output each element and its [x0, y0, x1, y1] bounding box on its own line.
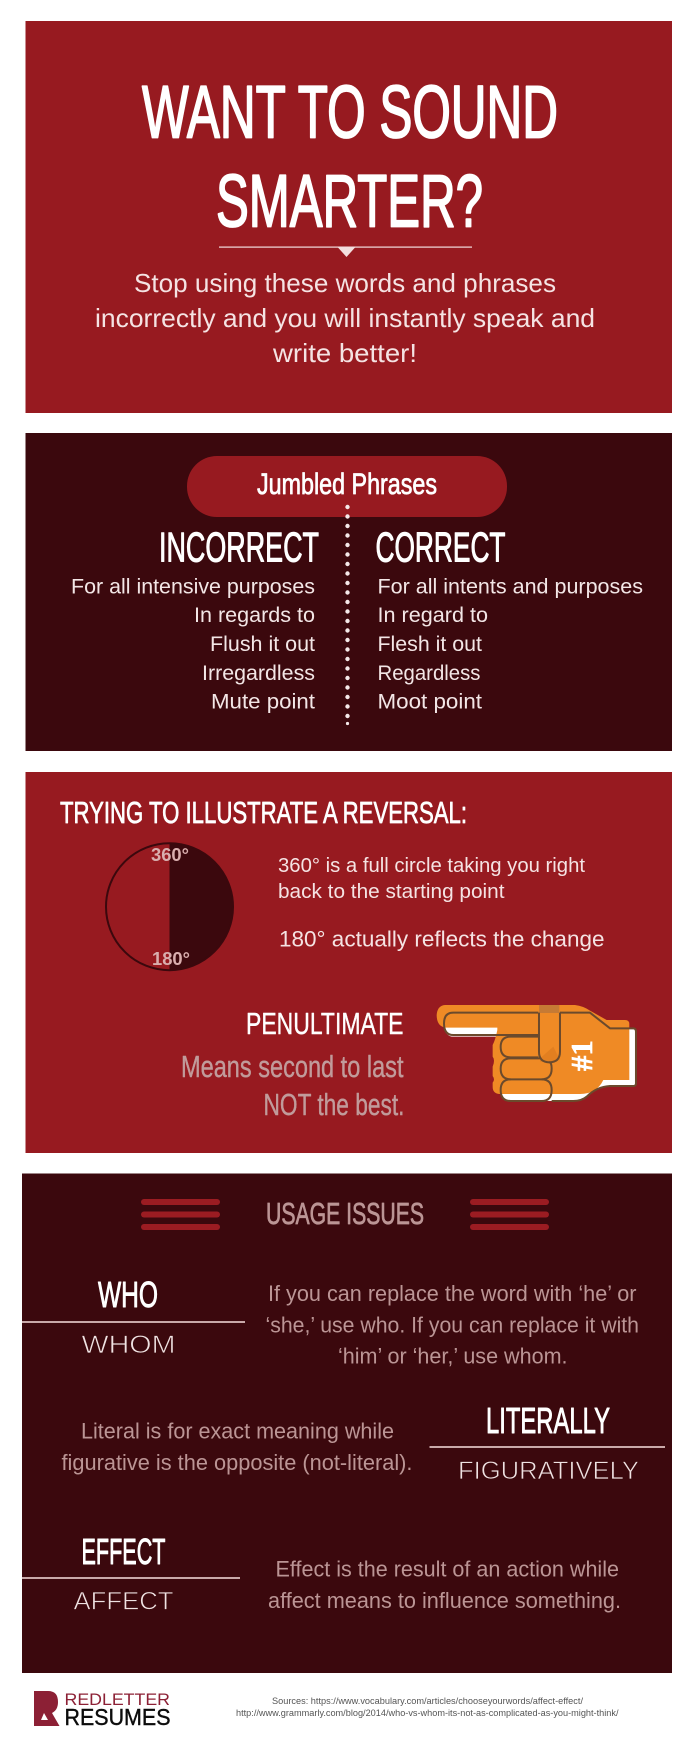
- subtitle: write better!: [272, 338, 417, 368]
- divider with pointer: [219, 246, 472, 257]
- effect vs affect: [22, 1531, 621, 1616]
- reversal explanation: back to the starting point: [278, 881, 505, 903]
- icon: foam finger hand: #1: [565, 1040, 599, 1071]
- reversal explanation: [278, 855, 604, 952]
- icon: foam finger hand: [437, 1005, 636, 1101]
- chart: half circle: 180°: [152, 949, 190, 969]
- chart: half circle: [106, 843, 234, 971]
- who vs whom: ‘she,’ use who. If you can replace it with: [266, 1312, 639, 1338]
- penultimate text: [181, 1007, 404, 1122]
- correct column: Moot point: [378, 690, 482, 714]
- incorrect column: [71, 524, 319, 714]
- subtitle: incorrectly and you will instantly speak and: [95, 303, 595, 333]
- reversal heading: TRYING TO ILLUSTRATE A REVERSAL:: [60, 796, 467, 830]
- effect vs affect: EFFECT: [82, 1531, 166, 1572]
- penultimate text: PENULTIMATE: [246, 1007, 404, 1041]
- literally vs figuratively: FIGURATIVELY: [458, 1457, 639, 1485]
- correct column: Regardless: [378, 662, 480, 685]
- logo: RedLetter Resumes: RESUMES: [64, 1704, 170, 1730]
- incorrect column: Flush it out: [210, 633, 315, 656]
- incorrect column: Irregardless: [202, 662, 315, 685]
- who vs whom: ‘him’ or ‘her,’ use whom.: [338, 1344, 568, 1368]
- incorrect column: INCORRECT: [159, 524, 319, 570]
- correct column: [376, 524, 643, 714]
- usage heading with bars: USAGE ISSUES: [266, 1197, 424, 1231]
- correct column: Flesh it out: [378, 633, 482, 656]
- subtitle: [95, 268, 595, 368]
- correct column: In regard to: [378, 604, 488, 627]
- incorrect column: For all intensive purposes: [71, 576, 315, 598]
- literally vs figuratively: [62, 1400, 665, 1485]
- correct column: For all intents and purposes: [378, 576, 643, 598]
- subtitle: Stop using these words and phrases: [134, 268, 556, 298]
- sources: Sources: https://www.vocabulary.com/articles/chooseyourwords/affect-effect/: [272, 1696, 584, 1706]
- logo: RedLetter Resumes: [34, 1690, 170, 1730]
- title: SMARTER?: [216, 160, 483, 242]
- incorrect column: In regards to: [194, 604, 315, 627]
- panel: reversal and penultimate: [26, 772, 672, 1153]
- effect vs affect: Effect is the result of an action while: [276, 1556, 619, 1582]
- literally vs figuratively: LITERALLY: [486, 1400, 610, 1441]
- penultimate text: Means second to last: [181, 1049, 404, 1084]
- panel: header: [26, 21, 672, 413]
- who vs whom: WHOM: [82, 1331, 176, 1359]
- sources: http://www.grammarly.com/blog/2014/who-vs-whom-its-not-as-complicated-as-you-might-think/: [236, 1708, 619, 1718]
- sources: [236, 1696, 619, 1718]
- pill heading: [187, 456, 507, 517]
- effect vs affect: AFFECT: [74, 1588, 174, 1616]
- incorrect column: Mute point: [211, 690, 315, 714]
- penultimate text: NOT the best.: [264, 1087, 404, 1122]
- who vs whom: WHO: [98, 1274, 158, 1315]
- effect vs affect: affect means to influence something.: [268, 1588, 621, 1613]
- who vs whom: If you can replace the word with ‘he’ or: [268, 1281, 636, 1306]
- panel: usage issues: [22, 1174, 672, 1673]
- literally vs figuratively: figurative is the opposite (not-literal).: [62, 1450, 412, 1475]
- reversal explanation: 360° is a full circle taking you right: [278, 855, 585, 877]
- logo: RedLetter Resumes: REDLETTER: [64, 1690, 170, 1709]
- dotted divider: [345, 505, 350, 725]
- panel: jumbled phrases: [26, 433, 672, 751]
- correct column: CORRECT: [376, 524, 506, 570]
- chart: half circle: 360°: [151, 845, 189, 865]
- literally vs figuratively: Literal is for exact meaning while: [81, 1418, 394, 1444]
- usage heading with bars: [141, 1197, 549, 1231]
- who vs whom: [22, 1274, 639, 1368]
- pill heading: Jumbled Phrases: [257, 468, 437, 501]
- icon: R mark: [34, 1691, 60, 1726]
- title: [142, 70, 558, 242]
- reversal explanation: 180° actually reflects the change: [279, 926, 604, 952]
